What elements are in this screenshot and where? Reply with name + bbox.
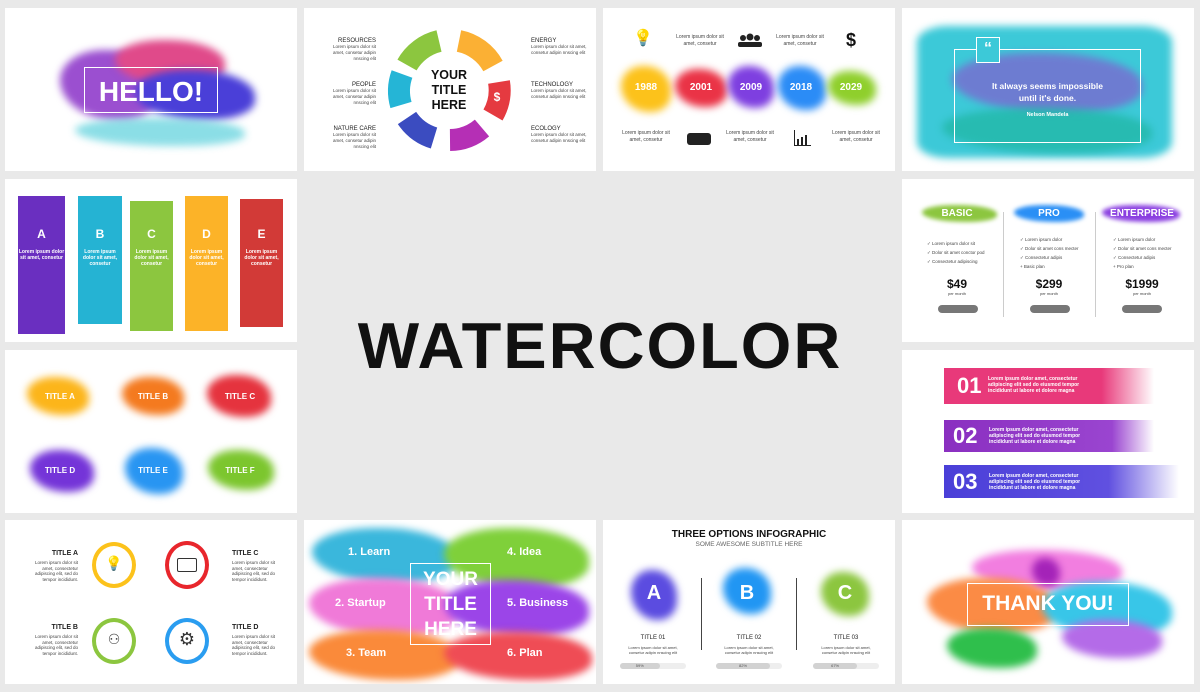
tile: numbered bars: Lorem ipsum dolor amet, consectetur bbox=[989, 473, 1078, 479]
tile: timeline: 2018 bbox=[790, 82, 812, 93]
tile: watercolor steps: 4. Idea bbox=[507, 546, 541, 558]
tile: ABCDE bars: A bbox=[37, 227, 46, 241]
tile: timeline: Lorem ipsum dolor sit amet, consetur bbox=[776, 34, 824, 46]
tile: pricing: BASIC bbox=[941, 208, 973, 219]
tile: cycle diagram: Lorem ipsum dolor sit amet, consetur adipin nnscing elit bbox=[333, 132, 376, 149]
left labels: Lorem ipsum dolor sit amet, consetur adipin nnscing elit bbox=[333, 44, 376, 61]
right labels: ENERGY bbox=[531, 38, 556, 44]
center title bbox=[431, 68, 467, 112]
tile: timeline: Lorem ipsum dolor sit amet, consetur bbox=[832, 130, 880, 142]
tile: circle icons: 💡 bbox=[105, 555, 123, 571]
center title: YOUR bbox=[431, 68, 467, 82]
tile: hello bbox=[5, 8, 297, 171]
tile: timeline: $ bbox=[846, 30, 856, 50]
tile: cycle diagram: NATURE CARE bbox=[333, 126, 376, 132]
tile: watercolor steps: HERE bbox=[424, 619, 477, 640]
tile: numbered bars: adipiscing elit sed do eiusmod tempor bbox=[989, 433, 1080, 439]
tile: three options: 82% bbox=[739, 663, 747, 668]
tile: pricing: $299 bbox=[1036, 277, 1062, 291]
tile: circle icons: TITLE B bbox=[52, 624, 78, 631]
tile: timeline bbox=[603, 8, 895, 171]
tile: numbered bars: adipiscing elit sed do eiusmod tempor bbox=[988, 382, 1079, 388]
tile: three options: C bbox=[838, 582, 852, 604]
tile: cycle diagram: PEOPLE bbox=[352, 82, 376, 88]
year blobs bbox=[621, 66, 671, 112]
tile: three options: TITLE 01 bbox=[641, 635, 665, 641]
tile: numbered bars: 01 bbox=[957, 373, 981, 398]
tile: numbered bars: incididunt ut labore et dolore magna bbox=[988, 388, 1074, 394]
tile: ABCDE bars: Lorem ipsum dolor sit amet, consetur bbox=[134, 249, 169, 267]
tile: pricing: ✓ Consectetur adipiscing bbox=[927, 259, 978, 264]
tile: numbered bars bbox=[902, 350, 1194, 513]
center box bbox=[410, 563, 491, 645]
tile: timeline: 2029 bbox=[840, 82, 862, 93]
tile: ABCDE bars bbox=[5, 179, 297, 342]
right labels: Lorem ipsum dolor sit amet, consetur adipin nnscing elit bbox=[531, 44, 587, 55]
tile: pricing: ✓ Dolor sit amet cons mecter bbox=[1113, 246, 1172, 251]
tile: thank you: THANK YOU! bbox=[982, 592, 1114, 615]
tile: cycle diagram: Lorem ipsum dolor sit amet, consetur adipin nnscing elit bbox=[531, 132, 587, 143]
tile: three options: TITLE 03 bbox=[834, 635, 858, 641]
tile: pricing: + Pro plan bbox=[1113, 264, 1134, 269]
tile: timeline: Lorem ipsum dolor sit amet, consetur bbox=[726, 130, 774, 142]
tile: circle icons: Lorem ipsum dolor sit amet, consectetur adipiscing elit, sed do tempor incididunt. bbox=[35, 560, 78, 582]
quote text bbox=[992, 81, 1103, 103]
tile: circle icons: ⚇ bbox=[108, 631, 120, 647]
tile: pricing: per month bbox=[1133, 291, 1151, 296]
tile: ABCDE bars: Lorem ipsum dolor sit amet, consetur bbox=[244, 249, 279, 267]
tile: titles A-F: TITLE D bbox=[45, 466, 75, 475]
tile: pricing: ✓ Dolor sit amet cons mecter bbox=[1020, 246, 1079, 251]
tile: three options: consetur adipin nnscing elit bbox=[822, 650, 870, 655]
icon: quote mark bbox=[976, 37, 1000, 63]
tile: watercolor steps: 5. Business bbox=[507, 597, 568, 609]
tile: circle icons: TITLE C bbox=[232, 550, 258, 557]
tile: pricing: + Basic plan bbox=[1020, 264, 1045, 269]
tile: timeline: 2001 bbox=[690, 82, 712, 93]
tile: cycle diagram: Lorem ipsum dolor sit amet, consetur adipin nnscing elit bbox=[531, 88, 587, 99]
tile: watercolor steps: 6. Plan bbox=[507, 647, 542, 659]
tile: three options: Lorem ipsum dolor sit amet, bbox=[724, 645, 774, 650]
tile: titles A-F: TITLE B bbox=[138, 392, 168, 401]
tile: numbered bars: 02 bbox=[953, 423, 977, 448]
tile: watercolor steps: 3. Team bbox=[346, 647, 386, 659]
tile: watercolor steps: YOUR bbox=[423, 569, 478, 590]
tile: cycle diagram: TECHNOLOGY bbox=[531, 82, 573, 88]
tile: pricing: ENTERPRISE bbox=[1110, 208, 1174, 219]
tile: ABCDE bars: B bbox=[96, 227, 104, 241]
tile: three options bbox=[603, 520, 895, 684]
tile: ABCDE bars: D bbox=[202, 227, 211, 241]
tile: numbered bars: Lorem ipsum dolor amet, consectetur bbox=[989, 427, 1078, 433]
tile: pricing: ✓ Consectetur adipis bbox=[1020, 255, 1062, 260]
tile: thank you bbox=[902, 520, 1194, 684]
tile: timeline: 1988 bbox=[635, 82, 657, 93]
tile: watercolor steps: TITLE bbox=[424, 594, 477, 615]
tile: cycle diagram: ECOLOGY bbox=[531, 126, 561, 132]
tile: titles A-F: TITLE A bbox=[45, 392, 75, 401]
bottom row: Lorem ipsum dolor sit amet, consetur bbox=[622, 130, 670, 142]
title: WATERCOLOR: WATERCOLOR bbox=[358, 309, 842, 382]
tile: titles A-F bbox=[5, 350, 297, 513]
ring bbox=[388, 30, 511, 151]
tile: numbered bars: Lorem ipsum dolor amet, consectetur bbox=[988, 376, 1077, 382]
tile: numbered bars: 03 bbox=[953, 469, 977, 494]
quote box bbox=[954, 49, 1141, 143]
tile: three options: A bbox=[647, 582, 661, 604]
center title: HERE bbox=[432, 98, 466, 112]
tile: pricing: $1999 bbox=[1125, 277, 1159, 291]
tile: numbered bars: adipiscing elit sed do eiusmod tempor bbox=[989, 479, 1080, 485]
tile: timeline: Lorem ipsum dolor sit amet, consetur bbox=[676, 34, 724, 46]
tile: circle icons: TITLE A bbox=[52, 550, 78, 557]
tile: pricing bbox=[902, 179, 1194, 342]
tile: three options: Lorem ipsum dolor sit amet, bbox=[821, 645, 871, 650]
top icons: 💡 bbox=[633, 30, 653, 47]
tile: quote bbox=[902, 8, 1194, 171]
tile: pricing: ✓ Consectetur adipis bbox=[1113, 255, 1155, 260]
ring: $ bbox=[494, 90, 501, 104]
tile: cycle diagram bbox=[304, 8, 596, 171]
tile: ABCDE bars: Lorem ipsum dolor sit amet, consetur bbox=[19, 249, 64, 261]
tile: three options: consetur adipin nnscing elit bbox=[725, 650, 773, 655]
tile: cycle diagram: Lorem ipsum dolor sit amet, consetur adipin nnscing elit bbox=[333, 88, 376, 105]
tile: pricing: ✓ Dolor sit amet conctor pod bbox=[927, 250, 985, 255]
tile: titles A-F: TITLE C bbox=[225, 392, 255, 401]
tile: three options: consetur adipin nnscing elit bbox=[629, 650, 677, 655]
quote text: It always seems impossible bbox=[992, 81, 1103, 91]
quote text: until it's done. bbox=[1019, 93, 1076, 103]
tile: watercolor steps: 1. Learn bbox=[348, 546, 390, 558]
tile: circle icons bbox=[5, 520, 297, 684]
tile: ABCDE bars: E bbox=[257, 227, 266, 241]
tile: three options: 67% bbox=[831, 663, 839, 668]
tile: pricing: $49 bbox=[947, 277, 967, 291]
tile: numbered bars: incididunt ut labore et dolore magna bbox=[989, 485, 1075, 491]
tile: three options: 59% bbox=[636, 663, 644, 668]
hello box: HELLO! bbox=[99, 76, 203, 107]
tile: circle icons: Lorem ipsum dolor sit amet, consectetur adipiscing elit, sed do tempor incididunt. bbox=[232, 634, 275, 656]
tile: three options: B bbox=[740, 582, 754, 604]
tile: pricing: ✓ Lorem ipsum dolor bbox=[1113, 237, 1155, 242]
tile: pricing: ✓ Lorem ipsum dolor sit bbox=[927, 241, 975, 246]
thank you box bbox=[967, 583, 1129, 626]
tile: watercolor steps: 2. Startup bbox=[335, 597, 386, 609]
tile: three options: SOME AWESOME SUBTITLE HERE bbox=[695, 541, 803, 548]
tile: circle icons: TITLE D bbox=[232, 624, 258, 631]
tile: numbered bars: incididunt ut labore et dolore magna bbox=[989, 439, 1075, 445]
tile: quote: Nelson Mandela bbox=[1027, 112, 1068, 118]
tile: watercolor steps bbox=[304, 520, 596, 684]
hello box bbox=[84, 67, 218, 113]
tile: ABCDE bars: Lorem ipsum dolor sit amet, consetur bbox=[189, 249, 224, 267]
tile: three options: TITLE 02 bbox=[737, 635, 761, 641]
tile: timeline: 2009 bbox=[740, 82, 762, 93]
tile: titles A-F: TITLE E bbox=[138, 466, 168, 475]
icon: quote mark: “ bbox=[984, 40, 992, 57]
tile: circle icons: ⚙ bbox=[179, 629, 195, 649]
center title: TITLE bbox=[432, 83, 466, 97]
tile: titles A-F: TITLE F bbox=[225, 466, 255, 475]
tile: pricing: per month bbox=[1040, 291, 1058, 296]
right labels bbox=[531, 38, 587, 55]
tile: three options: Lorem ipsum dolor sit amet, bbox=[628, 645, 678, 650]
tile: circle icons: Lorem ipsum dolor sit amet, consectetur adipiscing elit, sed do tempor incididunt. bbox=[232, 560, 275, 582]
tile: pricing: per month bbox=[948, 291, 966, 296]
tile: ABCDE bars: Lorem ipsum dolor sit amet, consetur bbox=[83, 249, 117, 267]
left labels: RESOURCES bbox=[338, 38, 376, 44]
tile: pricing: PRO bbox=[1038, 208, 1060, 219]
tile: three options: THREE OPTIONS INFOGRAPHIC bbox=[672, 529, 826, 540]
tile: circle icons: Lorem ipsum dolor sit amet, consectetur adipiscing elit, sed do tempor incididunt. bbox=[35, 634, 78, 656]
tile: pricing: ✓ Lorem ipsum dolor bbox=[1020, 237, 1062, 242]
tile: ABCDE bars: C bbox=[147, 227, 156, 241]
